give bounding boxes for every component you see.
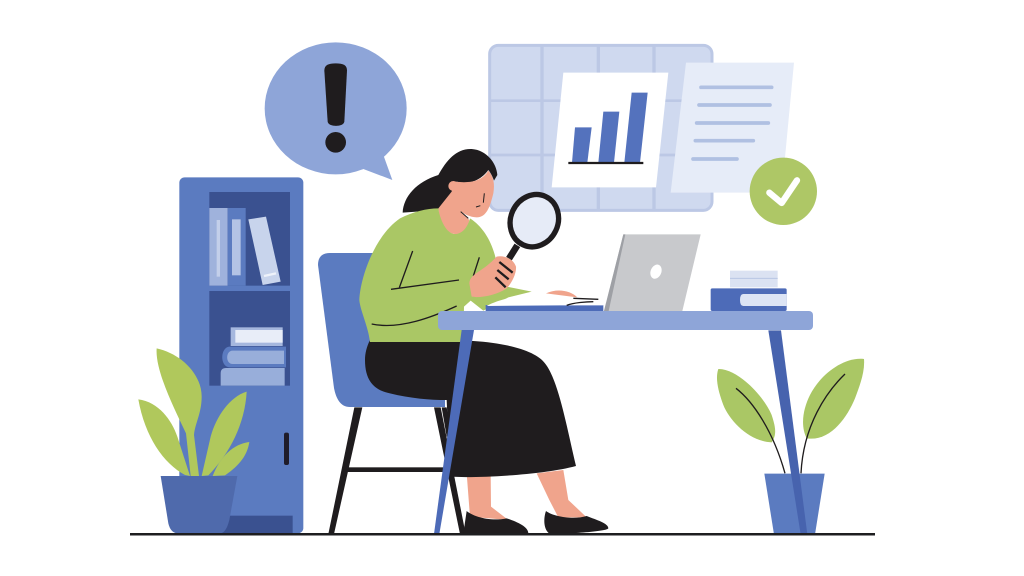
pot	[161, 476, 237, 533]
chair	[318, 253, 466, 534]
magnifying glass	[502, 186, 567, 259]
bar chart card	[552, 73, 668, 187]
open book and left hand	[486, 290, 603, 311]
hair	[403, 149, 497, 213]
leaves and stems	[717, 359, 864, 473]
icon: green check badge	[750, 158, 817, 225]
hand	[469, 256, 516, 297]
laptop	[604, 234, 701, 311]
floor line	[130, 533, 875, 536]
chair legs	[328, 407, 466, 534]
face and neck	[438, 171, 494, 234]
skirt	[365, 340, 576, 477]
chair seat and back	[318, 253, 445, 407]
upper body and head	[359, 149, 567, 342]
cabinet handle	[284, 433, 289, 465]
leaves	[138, 348, 249, 476]
desk top	[438, 311, 813, 330]
book stack on lower shelf	[221, 327, 286, 386]
right potted plant	[717, 359, 864, 534]
left potted plant	[138, 348, 249, 533]
desk	[434, 311, 813, 534]
desk right leg	[768, 330, 807, 534]
pot	[764, 474, 825, 534]
document	[671, 63, 794, 193]
legs and shoes	[463, 470, 608, 534]
grid panel	[490, 45, 712, 210]
books on top shelf	[209, 208, 281, 286]
panel: data grid with chart and document	[490, 45, 817, 225]
green sweater	[359, 208, 532, 342]
books on desk	[711, 271, 787, 311]
speech bubble with exclamation mark	[265, 42, 407, 180]
bookcase	[179, 177, 303, 533]
desk left leg	[434, 330, 474, 534]
woman	[359, 149, 608, 534]
